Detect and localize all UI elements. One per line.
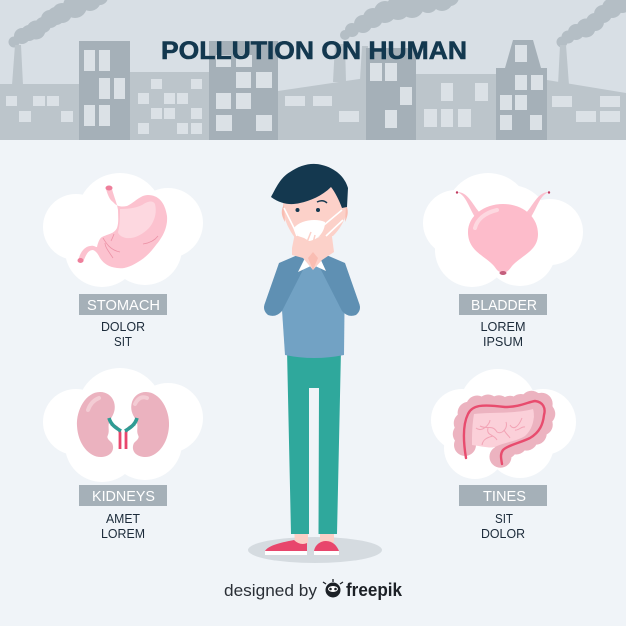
- icon: tines: [464, 401, 545, 464]
- label: tines: TINES: [483, 488, 526, 505]
- icon: bladder: [456, 191, 550, 275]
- building windows: [6, 45, 620, 134]
- label: stomach: STOMACH: [87, 297, 160, 314]
- panel: bladder: [423, 173, 583, 349]
- text: lorem ipsum: [480, 320, 526, 349]
- hands: [292, 229, 334, 270]
- panel: stomach: [43, 173, 203, 349]
- text: dolor sit: [101, 320, 145, 349]
- panel: polluted city header: [0, 0, 626, 140]
- panel: kidneys: [43, 368, 203, 541]
- text: dolor sit: DOLOR: [101, 320, 145, 334]
- text: sit dolor: SIT: [495, 512, 513, 526]
- sweater body: [282, 264, 345, 358]
- text: sit dolor: [481, 512, 525, 541]
- shoes: [265, 540, 339, 555]
- cloud: bladder: [423, 173, 583, 287]
- panel: tines: [431, 369, 576, 541]
- text: sit dolor: DOLOR: [481, 527, 525, 541]
- attribution footer: [224, 579, 403, 600]
- attribution footer: freepik: [346, 580, 403, 600]
- cloud: tines: [431, 369, 576, 479]
- dark buildings: [79, 40, 547, 140]
- text: amet lorem: [101, 512, 145, 541]
- arms: [264, 254, 360, 316]
- text: lorem ipsum: LOREM: [480, 320, 526, 334]
- label: tines: [459, 485, 547, 506]
- attribution footer: designed by: [224, 582, 318, 600]
- icon: freepik logo: [323, 579, 343, 598]
- text: amet lorem: AMET: [106, 512, 140, 526]
- text: dolor sit: SIT: [114, 335, 132, 349]
- ankles: [294, 530, 334, 546]
- label: kidneys: [79, 485, 167, 506]
- hair: [271, 164, 348, 208]
- cloud: stomach: [43, 173, 203, 287]
- ground shadow: [248, 537, 382, 563]
- text: lorem ipsum: IPSUM: [483, 335, 523, 349]
- ears: [282, 205, 348, 222]
- smoke plumes: [8, 0, 626, 48]
- label: bladder: BLADDER: [471, 297, 537, 314]
- label: stomach: [79, 294, 167, 315]
- text: amet lorem: LOREM: [101, 527, 145, 541]
- icon: stomach: [78, 186, 167, 268]
- mask: [284, 208, 343, 243]
- figure: man wearing mask: [248, 164, 382, 563]
- shirt collar: [298, 258, 326, 272]
- thumbs crossing: [308, 252, 318, 270]
- title: POLLUTION ON HUMAN: [161, 37, 467, 65]
- trousers: [287, 350, 341, 534]
- head: [283, 180, 347, 238]
- label: bladder: [459, 294, 547, 315]
- factory silhouettes and chimneys: [0, 44, 626, 140]
- label: kidneys: KIDNEYS: [92, 488, 155, 505]
- icon: kidneys: [77, 392, 169, 457]
- cloud: kidneys: [43, 368, 203, 482]
- eyes and eyebrow: [296, 201, 327, 212]
